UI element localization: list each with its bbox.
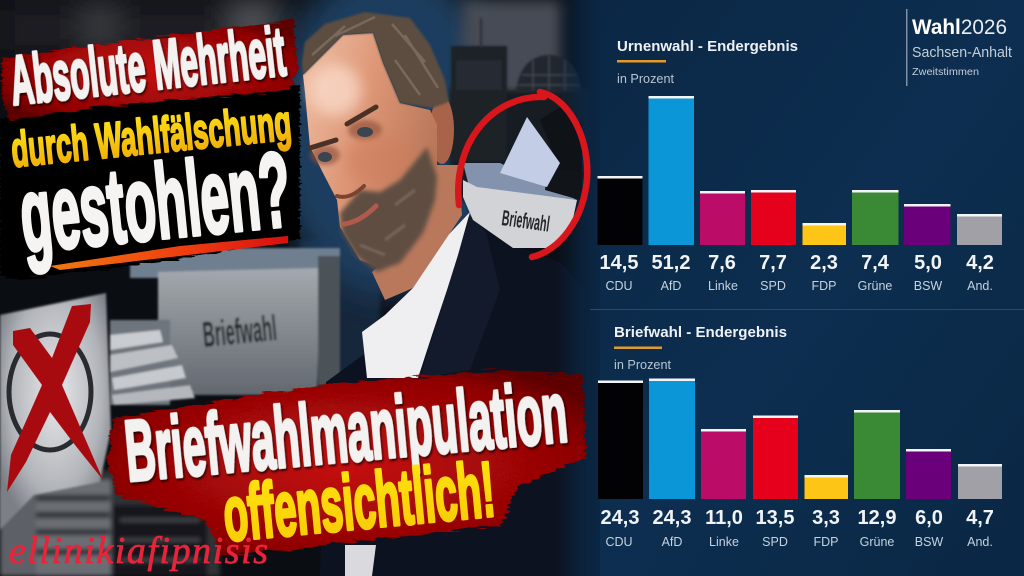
values: 7,4	[861, 252, 890, 274]
values: 13,5	[756, 507, 794, 529]
branding state: Sachsen-Anhalt	[912, 44, 1013, 61]
values: 24,3	[601, 507, 639, 529]
headline line 2: offensichtlich!	[219, 445, 498, 558]
party labels: SPD	[760, 279, 786, 293]
chart: Briefwahl	[598, 324, 1002, 549]
values: 7,7	[759, 252, 787, 274]
photo backdrop	[0, 0, 600, 576]
reichstag sky	[462, 0, 562, 100]
values: 4,2	[966, 252, 994, 274]
values	[600, 252, 994, 274]
values: 7,6	[708, 252, 736, 274]
divider between charts	[590, 309, 1024, 310]
branding year: Wahl2026	[912, 16, 1007, 39]
party labels: And.	[967, 535, 993, 549]
hair	[302, 12, 449, 108]
values: 51,2	[652, 252, 690, 274]
red brush	[107, 370, 586, 556]
bars	[598, 96, 1002, 245]
bars	[598, 378, 1002, 499]
party labels: Linke	[708, 279, 738, 293]
black brush	[0, 85, 300, 280]
party labels: And.	[967, 279, 993, 293]
forehead highlight	[309, 64, 361, 116]
bottom headline: Briefwahlmanipulation	[121, 364, 571, 500]
ballot circle	[9, 334, 91, 450]
bottom headline	[107, 364, 586, 558]
briefwahl box behind	[130, 248, 340, 395]
inset box	[463, 180, 577, 248]
inset box lid	[463, 163, 577, 200]
ear	[430, 96, 454, 164]
party labels: FDP	[814, 535, 838, 549]
values	[601, 507, 994, 529]
values: 2,3	[810, 252, 838, 274]
red cross	[7, 304, 103, 492]
inset hand	[540, 106, 582, 190]
party labels: CDU	[605, 535, 633, 549]
values: 5,0	[914, 252, 942, 274]
unit note: in Prozent	[617, 72, 675, 86]
branding vote type: Zweitstimmen	[912, 66, 979, 78]
top headline	[0, 12, 300, 280]
headline line 2: durch Wahlfälschung	[9, 94, 294, 178]
values: 3,3	[812, 507, 840, 529]
nose	[337, 186, 364, 197]
ballot sheet	[0, 293, 111, 530]
party labels	[605, 279, 993, 293]
inset label: Briefwahl	[500, 205, 551, 237]
party labels: Grüne	[860, 535, 894, 549]
lower mid background	[300, 240, 380, 380]
party labels: CDU	[605, 279, 633, 293]
chart title: Briefwahl - Endergebnis	[614, 324, 787, 341]
reichstag dome	[516, 55, 582, 92]
red brush	[2, 20, 298, 121]
chart: Urnenwahl	[598, 38, 1002, 293]
party labels: AfD	[661, 279, 681, 293]
shirt	[362, 212, 470, 378]
branding block	[906, 9, 1013, 86]
branding rule	[906, 9, 908, 86]
values: 6,0	[915, 507, 943, 529]
reichstag tower	[451, 18, 507, 161]
reichstag building	[450, 90, 590, 200]
speaker portrait	[302, 12, 590, 576]
cheek flush	[345, 136, 415, 184]
chart background	[600, 0, 1024, 576]
top-left soft streaks	[0, 0, 300, 60]
inset ballot paper	[500, 117, 560, 187]
values: 24,3	[653, 507, 691, 529]
lower dark stacks	[0, 470, 220, 576]
party labels: AfD	[662, 535, 682, 549]
party labels: BSW	[915, 535, 943, 549]
watermark: ellinikiafipnisis	[9, 530, 268, 572]
blue glow behind head	[270, 0, 510, 295]
right fade	[555, 0, 600, 576]
unit note: in Prozent	[614, 358, 672, 372]
orange slash	[50, 236, 288, 270]
values: 11,0	[705, 507, 743, 529]
briefwahl box behind: Briefwahl	[201, 307, 278, 355]
values: 4,7	[966, 507, 994, 529]
inset dark slot	[545, 167, 583, 200]
eyes	[318, 127, 373, 162]
beard	[340, 147, 437, 272]
envelope stack	[110, 320, 195, 405]
party labels: FDP	[812, 279, 836, 293]
chart title: Urnenwahl - Endergebnis	[617, 38, 798, 55]
party labels: BSW	[914, 279, 942, 293]
ballot box inset	[458, 92, 587, 257]
values: 14,5	[600, 252, 638, 274]
party labels	[605, 535, 993, 549]
infographic thumbnail: gestohlen?	[15, 131, 296, 275]
brows	[310, 107, 376, 148]
party labels: SPD	[762, 535, 788, 549]
party labels: Linke	[709, 535, 739, 549]
jacket	[320, 215, 590, 576]
values: 12,9	[858, 507, 896, 529]
face	[303, 33, 437, 272]
neck	[372, 165, 462, 300]
mouth	[344, 206, 376, 224]
party labels: Grüne	[858, 279, 892, 293]
red circle	[458, 92, 587, 257]
eye socket shadows	[310, 120, 382, 165]
